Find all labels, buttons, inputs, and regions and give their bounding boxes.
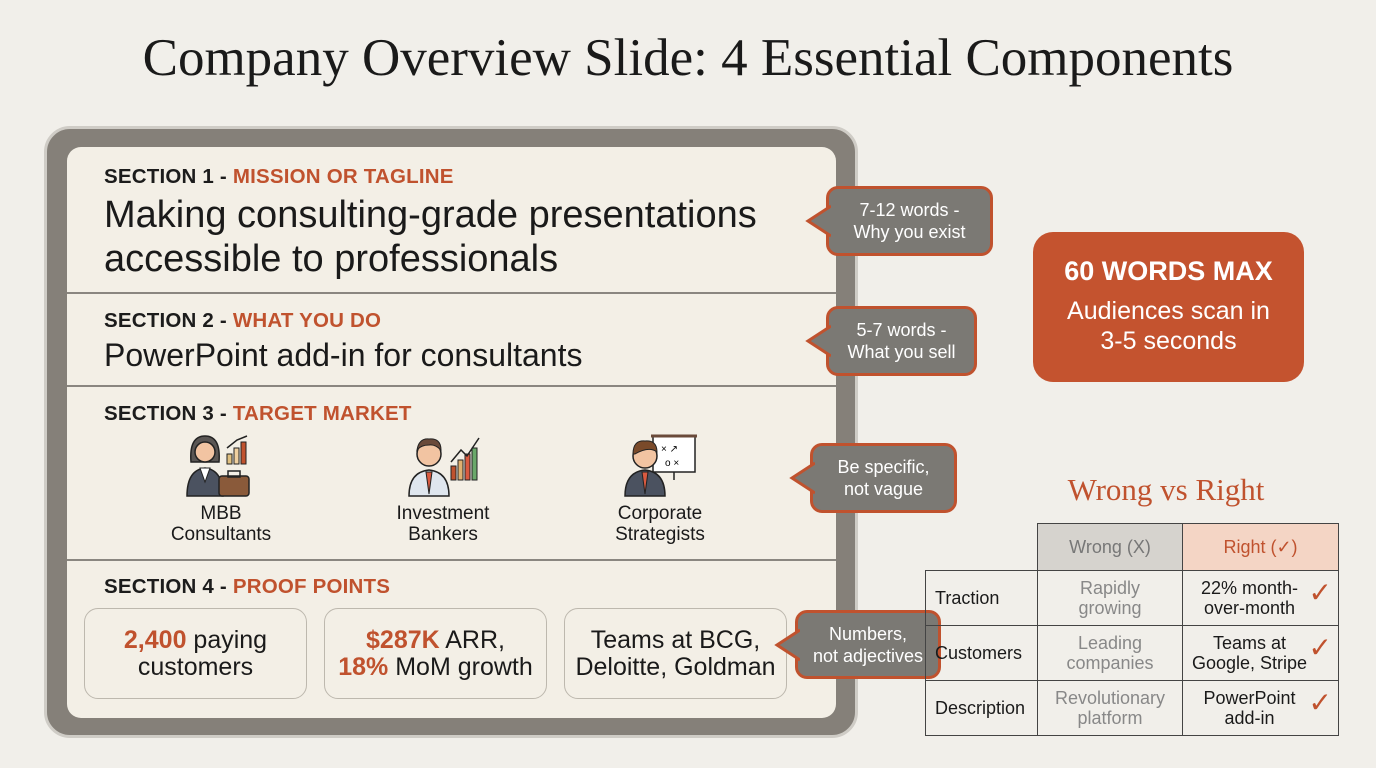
table: wrong vs right: Right (✓) bbox=[1223, 537, 1298, 557]
callout: 7-12 words: Why you exist bbox=[853, 222, 966, 242]
section 2 text: PowerPoint add-in for consultants bbox=[104, 337, 582, 373]
proof point: customers: customers bbox=[138, 652, 253, 680]
proof point: customers bbox=[84, 608, 307, 699]
callout: 60 words max: Audiences scan in bbox=[1067, 297, 1270, 325]
table: wrong vs right: Leading bbox=[1078, 633, 1142, 653]
section 4 heading: SECTION 4 - PROOF POINTS bbox=[104, 575, 390, 598]
table: wrong vs right: companies bbox=[1066, 653, 1154, 673]
proof point: teams: Deloitte, Goldman bbox=[575, 652, 776, 680]
label: MBB consultants: MBB bbox=[200, 503, 242, 524]
table: wrong vs right: Revolutionary bbox=[1055, 688, 1165, 708]
proof point: teams bbox=[564, 608, 787, 699]
callout: 5-7 words: 5-7 words - bbox=[856, 320, 946, 340]
callout: 7-12 words bbox=[826, 186, 993, 256]
table: wrong vs right: 22% month- bbox=[1201, 578, 1298, 598]
section 1 text: Making consulting-grade presentations bbox=[104, 194, 757, 236]
panel: inner slide bbox=[67, 147, 836, 718]
label: corporate strategists bbox=[615, 503, 705, 545]
callout: 60 words max: 3-5 seconds bbox=[1100, 327, 1237, 355]
label: MBB consultants: Consultants bbox=[171, 524, 271, 545]
callout: 5-7 words: What you sell bbox=[847, 342, 956, 362]
proof point: customers: 2,400 paying bbox=[124, 626, 267, 654]
title: Company Overview Slide: 4 Essential Components bbox=[143, 29, 1233, 87]
icon: corporate strategist: o × bbox=[665, 458, 679, 469]
table: wrong vs right: over-month bbox=[1204, 598, 1295, 618]
section 1 text bbox=[104, 194, 757, 280]
table: wrong vs right: Rapidly bbox=[1080, 578, 1140, 598]
table: wrong vs right: Wrong (X) bbox=[1069, 537, 1151, 557]
label: investment bankers bbox=[397, 503, 490, 545]
table: wrong vs right: ✓ bbox=[1309, 687, 1332, 718]
icon: MBB consultant bbox=[186, 435, 250, 497]
table: wrong vs right: add-in bbox=[1224, 708, 1275, 728]
callout: 5-7 words bbox=[826, 306, 977, 376]
icon: investment banker bbox=[408, 438, 480, 497]
table: wrong vs right bbox=[925, 523, 1339, 736]
table: wrong vs right: ✓ bbox=[1309, 577, 1332, 608]
section 1 text: accessible to professionals bbox=[104, 238, 558, 280]
table: wrong vs right: platform bbox=[1077, 708, 1143, 728]
callout: numbers bbox=[795, 610, 941, 679]
proof point: teams: Teams at BCG, bbox=[591, 626, 760, 654]
callout: be specific: not vague bbox=[844, 479, 923, 499]
heading: wrong vs right: Wrong vs Right bbox=[1068, 472, 1264, 507]
section 1 heading: SECTION 1 - MISSION OR TAGLINE bbox=[104, 165, 454, 188]
proof point: ARR: 18% MoM growth bbox=[338, 652, 533, 680]
label: MBB consultants bbox=[171, 503, 271, 545]
label: corporate strategists: Corporate bbox=[618, 503, 702, 524]
callout: 60 words max: 60 WORDS MAX bbox=[1064, 256, 1273, 286]
table: wrong vs right: Traction bbox=[935, 588, 999, 608]
icon: corporate strategist: × ↗ bbox=[661, 444, 678, 455]
callout: be specific bbox=[810, 443, 957, 513]
table: wrong vs right: growing bbox=[1078, 598, 1142, 618]
table: wrong vs right: Teams at bbox=[1213, 633, 1286, 653]
table: wrong vs right: Description bbox=[935, 698, 1025, 718]
callout: 7-12 words: 7-12 words - bbox=[859, 200, 960, 220]
table: wrong vs right: PowerPoint bbox=[1203, 688, 1296, 708]
label: investment bankers: Investment bbox=[397, 503, 489, 524]
proof point: ARR: $287K ARR, bbox=[366, 626, 505, 654]
callout: numbers: not adjectives bbox=[813, 646, 923, 666]
callout: numbers: Numbers, bbox=[829, 624, 907, 644]
label: corporate strategists: Strategists bbox=[615, 524, 705, 545]
section 2 heading: SECTION 2 - WHAT YOU DO bbox=[104, 309, 381, 332]
callout: be specific: Be specific, bbox=[837, 457, 930, 477]
table: wrong vs right: Google, Stripe bbox=[1192, 653, 1307, 673]
proof point: ARR bbox=[324, 608, 547, 699]
callout: 60 words max bbox=[1033, 232, 1304, 382]
table: wrong vs right: ✓ bbox=[1309, 632, 1332, 663]
panel: main slide frame bbox=[44, 126, 858, 738]
icon: corporate strategist bbox=[624, 434, 697, 497]
label: investment bankers: Bankers bbox=[408, 524, 478, 545]
table: wrong vs right: Customers bbox=[935, 643, 1022, 663]
section 3 heading: SECTION 3 - TARGET MARKET bbox=[104, 402, 412, 425]
